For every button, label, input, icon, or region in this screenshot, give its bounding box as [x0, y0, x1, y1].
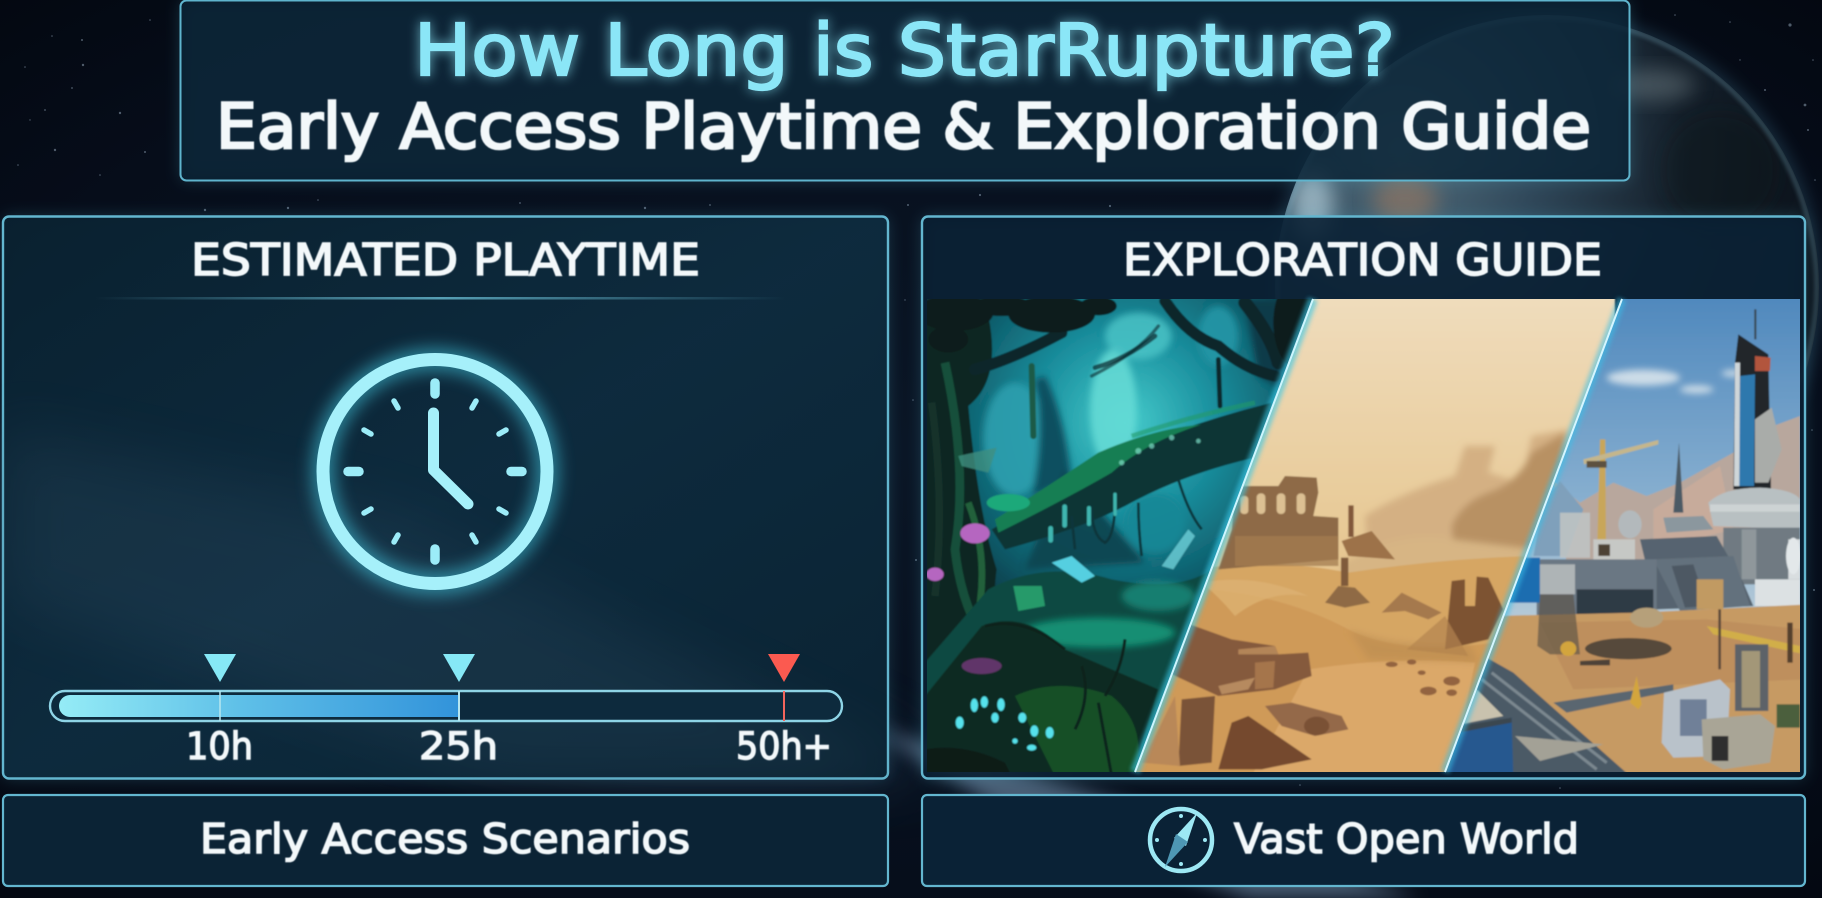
collapsed wall — [1445, 577, 1503, 649]
forest floor — [925, 569, 1212, 776]
branches — [975, 301, 1278, 436]
title panel — [180, 0, 1630, 180]
dunes — [1160, 556, 1524, 708]
land masses — [1290, 69, 1780, 241]
clouds — [1607, 370, 1745, 393]
label: Vast Open World — [1234, 815, 1579, 863]
label: Early Access Scenarios — [200, 815, 690, 863]
scene: industrial base — [1440, 296, 1810, 776]
scene: desert — [1135, 296, 1615, 776]
tree trunk — [927, 320, 997, 660]
label: 10h: 10h — [186, 725, 253, 768]
canopy leaves — [927, 299, 1312, 364]
clock hands — [434, 413, 468, 504]
panel: early access scenarios — [3, 795, 888, 886]
central building — [1640, 536, 1753, 609]
timeline bar — [50, 654, 842, 768]
scaffold — [1707, 609, 1800, 711]
glowing plants — [956, 696, 1054, 751]
crane — [1583, 439, 1658, 543]
fallen mossy log — [992, 403, 1272, 549]
road — [1440, 658, 1630, 776]
marker: 10h — [204, 654, 236, 682]
ground — [1488, 604, 1800, 772]
marker: 25h — [443, 654, 475, 682]
machinery — [1630, 676, 1800, 769]
heading: EXPLORATION GUIDE — [1123, 235, 1602, 286]
mountains — [1553, 416, 1800, 563]
title line 1: How Long is StarRupture? — [414, 9, 1395, 92]
marker: 50h+ — [768, 654, 800, 682]
label: 50h+: 50h+ — [736, 725, 832, 768]
panel: estimated playtime — [3, 216, 888, 778]
scene: jungle — [927, 299, 1312, 772]
panel: vast open world — [922, 795, 1805, 886]
panel: exploration guide — [917, 216, 1810, 778]
foreground foliage — [925, 621, 1158, 776]
planet — [1276, 15, 1822, 392]
glowing diagonal dividers — [1135, 299, 1622, 772]
distant mesas — [1342, 429, 1568, 583]
icon: compass — [1150, 809, 1212, 871]
icon: clock — [323, 360, 547, 584]
tower — [1733, 309, 1782, 489]
derrick and pit — [1537, 594, 1672, 665]
label: 25h: 25h — [419, 725, 498, 768]
dome tower base — [1708, 488, 1800, 529]
title line 2: Early Access Playtime & Exploration Guide — [216, 90, 1591, 163]
milky streak — [0, 430, 1420, 898]
purple flowers — [926, 523, 1002, 674]
broken columns — [1348, 505, 1354, 537]
foreground rocks — [1142, 624, 1460, 769]
blue container — [1448, 722, 1514, 772]
heading: ESTIMATED PLAYTIME — [191, 235, 700, 286]
glowing leaves — [1052, 529, 1195, 583]
temple ruin — [1218, 476, 1338, 569]
